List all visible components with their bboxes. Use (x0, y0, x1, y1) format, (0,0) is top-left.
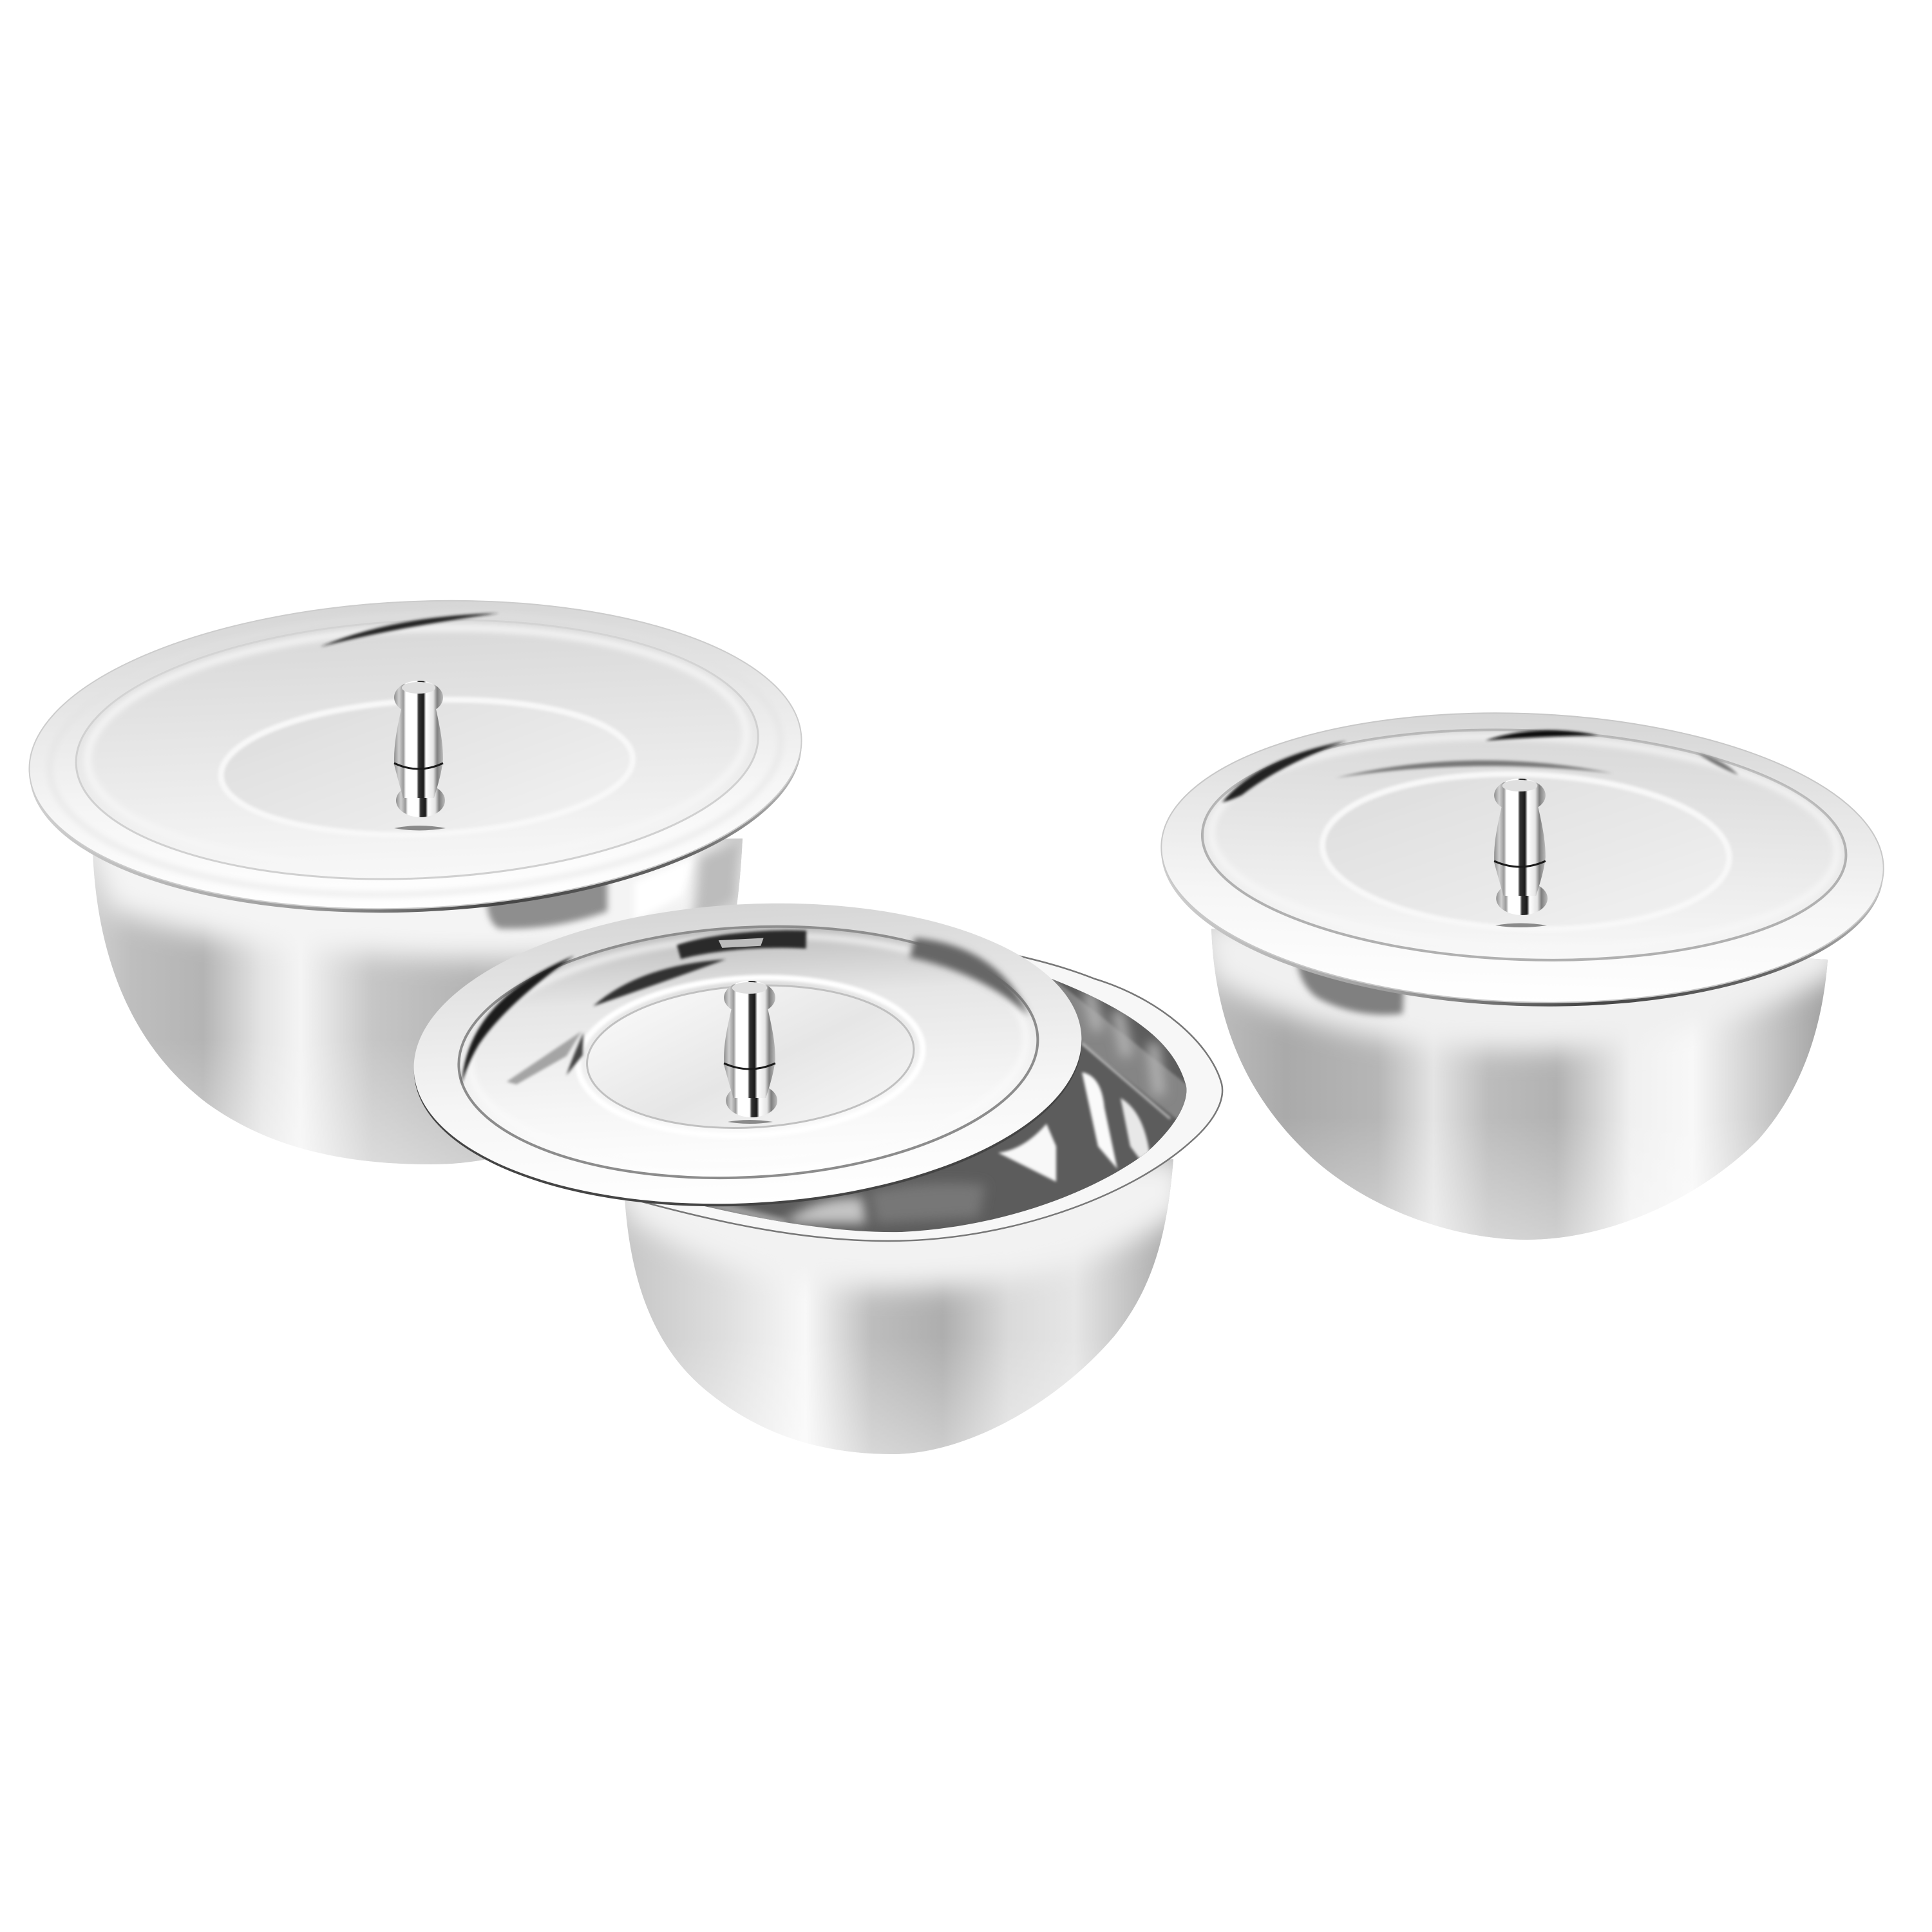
lid 3 outer rim (1157, 701, 1888, 1014)
lid 1 centre disc (218, 691, 636, 843)
bowl 2 body (612, 1159, 1185, 1455)
lid 2 outer rim (406, 887, 1089, 1220)
lid 3 highlights (1222, 719, 1740, 820)
bowl 3 body (1198, 921, 1842, 1243)
bowl 2 open rim (628, 950, 1222, 1241)
lid 1 outer rim (23, 585, 808, 925)
bowl 2 interior reflections (705, 979, 1186, 1233)
lid 2 recessed field (452, 913, 1044, 1192)
bowl 1: large left bowl with lid (23, 585, 808, 1172)
bowl 1 body (84, 837, 753, 1172)
lid 2 centre disc (583, 978, 918, 1136)
bowl 1 lid (23, 585, 808, 929)
lid 3 underside edge (1156, 705, 1888, 1018)
bowl 1 knob (394, 681, 445, 817)
lid 2 highlights (455, 917, 1031, 1087)
lid 1 highlight (319, 613, 500, 647)
bowl 1 knob reflection (394, 826, 446, 831)
bowl 2: centre bowl with lid set aside (406, 887, 1222, 1455)
bowl 3 knob (1494, 779, 1548, 915)
bowl 2 knob reflection (728, 1120, 773, 1124)
product photo: three stainless steel bowls with lids (28, 600, 1884, 1454)
lid 1 underside edge (23, 589, 808, 929)
bowl 3: right bowl with lid (1156, 701, 1888, 1243)
bowl 2 lid (406, 887, 1090, 1223)
lid 3 recessed field (1198, 719, 1850, 971)
bowl 2 knob (724, 981, 777, 1117)
lid 2 underside edge (406, 889, 1090, 1223)
bowl 3 lid (1156, 701, 1888, 1018)
lid 1 recessed field (70, 606, 764, 893)
lid 3 centre disc (1320, 767, 1732, 936)
bowl 3 knob reflection (1495, 923, 1547, 927)
